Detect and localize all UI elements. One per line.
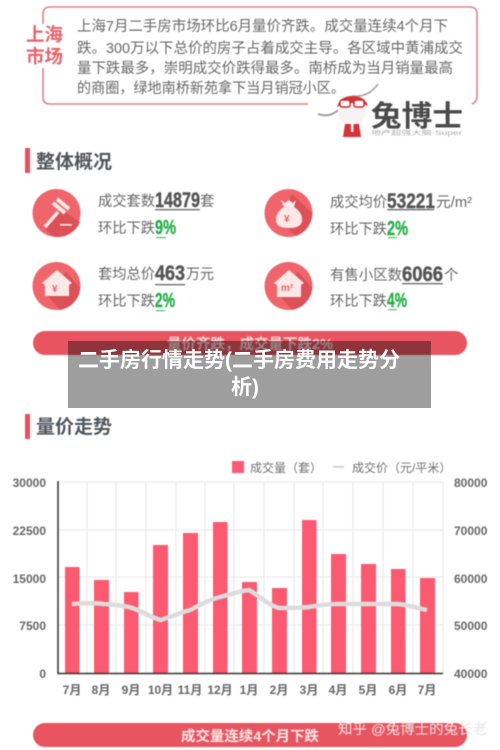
logo: rabbit doctor: [318, 84, 463, 137]
right axis labels: [454, 476, 488, 681]
stat: average price: 环比下跌: [330, 221, 387, 238]
banner: overview conclusion: 量价齐跌，成交量下跌2%: [167, 335, 333, 353]
left axis labels: 7500: [19, 619, 46, 633]
summary text: [77, 17, 463, 97]
month labels: 12月: [207, 683, 233, 697]
stat: average price: 2%: [387, 218, 408, 240]
summary text: 上海7月二手房市场环比6月量价齐跌。成交量连续4个月下: [77, 17, 448, 35]
logo: rabbit doctor: 兔博士: [371, 100, 463, 133]
banner: trend conclusion: 成交量连续4个月下跌: [181, 728, 319, 744]
month labels: 10月: [148, 683, 173, 697]
icon: house with square metres: [264, 262, 312, 310]
stat: average total price: 环比下跌: [98, 293, 155, 310]
stat: average price: 成交均价: [330, 193, 387, 211]
stat: average total price: 套均总价: [98, 266, 155, 283]
left axis labels: 30000: [13, 476, 46, 490]
banner: overview conclusion: [33, 331, 467, 355]
left axis labels: 22500: [13, 524, 46, 538]
month labels: 11月: [178, 683, 202, 697]
heading: overview: 整体概况: [36, 151, 112, 173]
stat: transactions: 成交套数: [98, 192, 155, 210]
stat: listed communities: 4%: [387, 290, 407, 312]
right axis labels: 50000: [454, 619, 488, 633]
stat: transactions: 14879: [155, 189, 200, 212]
stat: listed communities: 环比下跌: [330, 293, 387, 310]
stat: average price: [264, 189, 472, 240]
icon: money bag: ¥: [284, 214, 290, 225]
logo: rabbit doctor: 地产超强大脑·Super: [371, 129, 462, 137]
right axis labels: 80000: [454, 476, 488, 490]
summary text: 跌。300万以下总价的房子占着成交主导。各区域中黄浦成交: [77, 39, 463, 57]
left axis labels: [13, 476, 46, 681]
label: Shanghai market: [26, 24, 63, 67]
month labels: 8月: [92, 683, 110, 697]
axes: [58, 481, 443, 674]
stat: listed communities: [264, 262, 459, 312]
month labels: 7月: [63, 683, 81, 697]
legend: 成交量（套）: [250, 460, 322, 475]
stat: average total price: 2%: [155, 290, 175, 312]
icon: house with square metres: m²: [281, 283, 294, 294]
stat: transactions: 9%: [155, 217, 176, 239]
panel: Shanghai market summary: [26, 7, 477, 104]
bars: volume: [65, 520, 435, 673]
line: price: [72, 590, 427, 620]
watermark: 知乎 @兔博士的兔长老: [338, 721, 487, 737]
month labels: 5月: [359, 683, 377, 697]
summary text: 量下跌最多，崇明成交价跌得最多。南桥成为当月销量最高: [77, 59, 453, 77]
grid lines: [58, 482, 443, 673]
icon: house with yuan: ¥: [52, 284, 58, 295]
legend: 成交价（元/平米）: [352, 460, 451, 475]
label: Shanghai market: 市场: [26, 46, 63, 67]
heading: price and volume trend: 量价走势: [36, 416, 112, 438]
banner: trend conclusion: [33, 723, 467, 747]
right axis labels: 60000: [454, 572, 488, 586]
month labels: 1月: [240, 683, 258, 697]
stat: average total price: [32, 262, 214, 312]
month labels: 6月: [389, 683, 407, 697]
month labels: 4月: [329, 683, 347, 697]
icon: gavel: [32, 189, 80, 237]
right axis labels: 70000: [454, 524, 488, 538]
left axis labels: 15000: [13, 572, 46, 586]
title overlay: 二手房行情走势(二手房费用走势分: [78, 349, 400, 372]
stat: listed communities: 有售小区数: [330, 267, 402, 284]
stat: average price: 元/m²: [436, 195, 472, 211]
stat: transactions: 环比下跌: [98, 220, 155, 237]
chart: monthly volume and price: [13, 476, 488, 697]
stat: transactions: 套: [200, 193, 215, 210]
month labels: 3月: [300, 683, 318, 697]
stat: listed communities: 个: [444, 267, 459, 284]
stat: transactions: [32, 189, 215, 239]
label: Shanghai market: 上海: [26, 24, 63, 45]
summary text: 的商圈，绿地南桥新苑拿下当月销冠小区。: [77, 79, 345, 97]
month labels: [63, 683, 436, 697]
left axis labels: 0: [39, 667, 46, 681]
month labels: 9月: [122, 683, 140, 697]
stat: average total price: 万元: [186, 267, 214, 283]
icon: money bag: [264, 189, 312, 237]
icon: house with yuan: [32, 262, 80, 310]
legend: [232, 460, 451, 475]
title overlay: 析): [231, 376, 259, 399]
title overlay: [68, 341, 431, 408]
month labels: 7月: [418, 683, 436, 697]
stat: listed communities: 6066: [402, 263, 443, 286]
month labels: 2月: [270, 683, 288, 697]
stat: average price: 53221: [387, 190, 435, 213]
stat: average total price: 463: [155, 262, 185, 285]
right axis labels: 40000: [454, 667, 488, 681]
